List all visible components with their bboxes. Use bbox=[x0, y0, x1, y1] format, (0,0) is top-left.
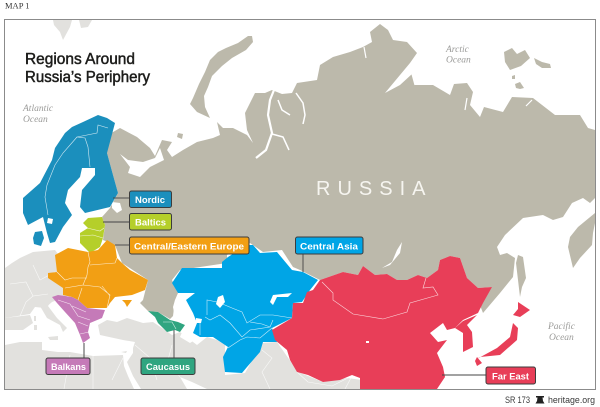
russia landmass bbox=[102, 24, 595, 319]
arctic islands bbox=[177, 48, 551, 139]
ocean label: atlantic bbox=[22, 104, 54, 125]
ocean label: atlantic: Atlantic bbox=[22, 104, 54, 114]
map label: MAP 1 bbox=[5, 0, 29, 10]
callout: nordic bbox=[113, 191, 172, 208]
callout: central and eastern europe bbox=[115, 237, 249, 254]
region: far east bbox=[272, 256, 530, 389]
ocean label: arctic bbox=[445, 45, 471, 66]
caspian sea bbox=[173, 293, 198, 343]
russia label: RUSSIA bbox=[316, 178, 432, 200]
ocean label: arctic: Arctic bbox=[445, 45, 470, 55]
source line: heritage.org bbox=[548, 395, 595, 405]
callout: baltics: Baltics bbox=[135, 218, 166, 228]
source line: SR 173 bbox=[505, 395, 530, 405]
ocean label: pacific: Ocean bbox=[549, 333, 574, 343]
region: baltics bbox=[80, 217, 105, 253]
callout: caucasus: Caucasus bbox=[146, 362, 190, 373]
ocean label: arctic: Ocean bbox=[446, 56, 471, 66]
callout: balkans bbox=[46, 343, 90, 374]
callout: central asia: Central Asia bbox=[300, 242, 359, 252]
ocean label: pacific: Pacific bbox=[547, 321, 576, 332]
neighbouring land: Europe, Middle East, South Asia bbox=[5, 20, 362, 389]
region: caucasus bbox=[148, 311, 185, 332]
white seas, gulfs and lakes in russia bbox=[112, 47, 532, 268]
callout: far east bbox=[442, 367, 536, 384]
ocean label: atlantic: Ocean bbox=[23, 115, 48, 125]
title bbox=[25, 51, 150, 86]
callout: central and eastern europe: Central/Eastern Europe bbox=[134, 242, 244, 252]
callout: balkans: Balkans bbox=[51, 362, 86, 373]
callout: caucasus bbox=[141, 330, 195, 374]
region: central and eastern europe bbox=[48, 240, 148, 308]
callout: central asia bbox=[296, 237, 363, 272]
region: balkans bbox=[52, 295, 105, 343]
icon: liberty bell bbox=[536, 396, 544, 404]
ocean label: pacific bbox=[547, 321, 576, 343]
region: central asia bbox=[172, 245, 318, 373]
callout: baltics bbox=[103, 214, 172, 230]
title: Regions Around bbox=[25, 51, 135, 68]
novaya zemlya bbox=[190, 36, 253, 118]
callout: far east: Far East bbox=[492, 372, 530, 382]
title: Russia’s Periphery bbox=[25, 69, 150, 86]
kamchatka and sakhalin bbox=[516, 213, 595, 297]
callout: nordic: Nordic bbox=[135, 195, 165, 206]
source line bbox=[505, 395, 595, 405]
region: nordic bbox=[23, 115, 118, 246]
